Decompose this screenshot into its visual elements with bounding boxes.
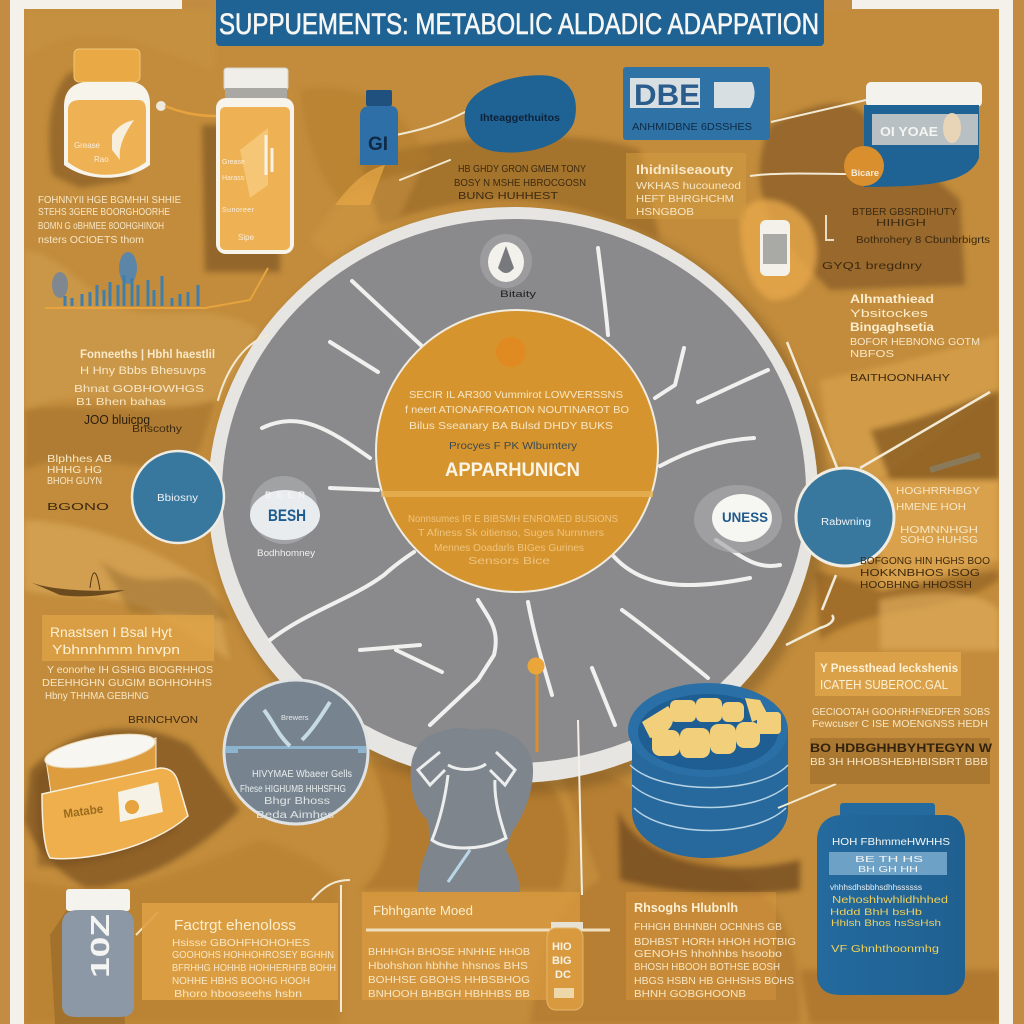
- icon: top-right jar: OI YOAE: [880, 124, 938, 139]
- text block: left lower: HHHG HG: [47, 464, 102, 476]
- icon: small blue bottle: GI: [368, 134, 388, 155]
- text block: left lower: BHOH GUYN: [47, 475, 102, 487]
- text block: right middle: Bingaghsetia: [850, 320, 934, 334]
- callout: blue banner top right: ANHMIDBNE 6DSSHES: [632, 122, 752, 133]
- icon: large blue jar: BH GH HH: [858, 865, 918, 874]
- icon: small label bottle: HIO: [552, 941, 572, 953]
- text block: right lower: HMENE HOH: [896, 501, 966, 513]
- text block: bottom center panel: [312, 880, 610, 1012]
- icon: small label bottle: [547, 922, 583, 1010]
- text block: right middle: [850, 292, 980, 384]
- right blue circle: [787, 342, 990, 566]
- central orange hub: Procyes F PK Wlbumtery: [449, 440, 578, 452]
- callout: grey lens: Bhgr Bhoss: [264, 795, 330, 807]
- text block: right panel: BO HDBGHHBYHTEGYN W: [810, 741, 993, 755]
- text block: right lower: HOKKNBHOS ISOG: [860, 567, 980, 579]
- text block: upper left: nsters OCIOETS thom: [38, 234, 144, 246]
- text block: right panel: Y Pnessthead leckshenis: [820, 661, 958, 675]
- text block: bottom left panel: BFRHHG HOHHB HOHHERHFB BOHH: [172, 962, 336, 974]
- text block: left middle: Bnscothy: [132, 423, 183, 435]
- text block: upper left: STEHS 3GERE BOORGHOORHE: [38, 206, 170, 218]
- text block: left panel upper: DEEHHGHN GUGIM BOHHOHHS: [42, 677, 212, 689]
- callout: blue banner top right: DBE: [634, 79, 700, 112]
- callout: blue banner top right: [623, 67, 770, 140]
- callout: grey lens: Beda Aimhes: [256, 809, 334, 821]
- text block: left middle: Fonneeths | Hbhl haestlil: [80, 347, 215, 361]
- central orange hub: Sensors Bice: [468, 556, 551, 567]
- central orange hub: Nonnsumes IR E BIBSMH ENROMED BUSIONS: [408, 514, 618, 525]
- text block: left middle: Bhnat GOBHOWHGS: [74, 383, 204, 395]
- icon: top-left jar: [49, 49, 150, 188]
- text block: top right column: HSNGBOB: [636, 206, 694, 218]
- text block: left middle: JOO bluicpg: [84, 412, 150, 427]
- text block: left panel upper: Y eonorhe IH GSHIG BIOGRHHOS: [47, 664, 213, 676]
- text block: left lower: [47, 453, 112, 513]
- text block: right lower: HOOBHNG HHOSSH: [860, 579, 972, 591]
- text block: left panel upper: [42, 615, 214, 726]
- text block: bottom right: [626, 892, 796, 1000]
- callout: grey lens: Brewers: [281, 713, 309, 722]
- text block: right middle: Alhmathiead: [850, 292, 934, 306]
- text block: left middle: H Hny Bbbs Bhesuvps: [80, 365, 207, 377]
- text block: right lower: SOHO HUHSG: [900, 534, 978, 546]
- text block: right upper: [822, 206, 990, 272]
- icon: cream jar lower left: Matabe: [62, 801, 104, 821]
- text block: bottom left panel: Factrgt ehenoloss: [174, 917, 296, 934]
- text block: right panel: ICATEH SUBEROC.GAL: [820, 677, 948, 692]
- icon: small airplane sketch: [30, 573, 125, 596]
- left blue circle: [132, 451, 224, 543]
- icon: left badge BEST: BEER: [265, 490, 306, 500]
- text block: bottom left panel: NOHHE HBHS BOOHG HOOH: [172, 975, 310, 987]
- callout: grey lens: HIVYMAE Wbaeer Gells: [252, 768, 352, 780]
- bar chart: mini skyline: [45, 252, 268, 308]
- icon: top-left tall bottle: [156, 68, 294, 272]
- central orange hub: APPARHUNICN: [445, 460, 580, 481]
- text block: bottom right: FHHGH BHHNBH OCHNHS GB: [634, 921, 782, 933]
- text block: right upper: GYQ1 bregdnry: [822, 260, 923, 272]
- icon: top droplet badge: [480, 234, 537, 299]
- icon: large blue jar: [817, 803, 965, 995]
- icon: top-left tall bottle: Grease: [222, 159, 245, 166]
- text block: right panel: GECIOOTAH GOOHRHFNEDFER SOBS: [812, 706, 990, 718]
- icon: top-right jar: [750, 82, 982, 187]
- text block: top center: [454, 163, 586, 202]
- connector line: center to bottom: [578, 720, 582, 895]
- text block: left panel upper: BRINCHVON: [128, 714, 198, 726]
- icon: small label bottle: BIG: [552, 955, 572, 967]
- text block: bottom center panel: Hbohshon hbhhe hhsnos BHS: [368, 960, 528, 972]
- icon: top-left jar: Rao: [94, 155, 109, 164]
- text block: upper left: BOMN G oBHMEE 8OOHGHINOH: [38, 220, 164, 232]
- text block: top right column: Ihidnilseaouty: [636, 162, 734, 177]
- central circular diagram: [208, 207, 828, 794]
- text block: right lower: HOGHRRHBGY: [896, 485, 980, 497]
- text block: top right column: WKHAS hucouneod: [636, 180, 741, 192]
- icon: small label bottle: DC: [555, 969, 571, 981]
- text block: right middle: NBFOS: [850, 348, 894, 360]
- text block: bottom right: BHOSH HBOOH BOTHSE BOSH: [634, 961, 780, 973]
- text block: right lower: HOMNNHGH: [900, 524, 978, 536]
- text block: bottom left panel: [142, 903, 338, 1000]
- icon: large blue jar: vhhhsdhsbbhsdhhssssss: [830, 883, 922, 892]
- text block: right middle: BAITHOONHAHY: [850, 372, 950, 384]
- text block: right lower: BOFGONG HIN HGHS BOO: [860, 555, 990, 567]
- text block: left lower: Blphhes AB: [47, 453, 112, 465]
- icon: blue bowl stack with pills: [628, 683, 836, 858]
- text block: right upper: BTBER GBSRDIHUTY: [852, 206, 957, 218]
- icon: cream jar lower left: [36, 727, 188, 867]
- text block: top center: BUNG HUHHEST: [458, 190, 559, 202]
- text block: left middle: [74, 335, 268, 435]
- text block: top center: BOSY N MSHE HBROCGOSN: [454, 177, 586, 189]
- text block: right middle: Ybsitockes: [850, 308, 929, 320]
- icon: right badge UNESS: UNESS: [722, 509, 768, 525]
- icon: large blue jar: Hhlsh Bhos hsSsHsh: [831, 918, 941, 928]
- icon: top droplet badge: Bitaity: [500, 289, 537, 299]
- text block: bottom right: BDHBST HORH HHOH HOTBIG: [634, 936, 796, 948]
- icon: grey bottle lower left: [50, 889, 158, 1024]
- text block: right panel: Fewcuser C ISE MOENGNSS HEDH: [812, 718, 988, 730]
- right blue circle: Rabwning: [821, 517, 871, 528]
- text block: bottom right: Rhsoghs Hlubnlh: [634, 900, 738, 915]
- icon: small blue bottle: [335, 90, 465, 205]
- icon: large blue jar: BE TH HS: [855, 855, 923, 864]
- central orange hub: f neert ATIONAFROATION NOUTINAROT BO: [405, 404, 629, 416]
- text block: bottom right: GENOHS hhohhbs hsoobo: [634, 948, 782, 960]
- text block: top right column: [626, 153, 746, 219]
- central orange hub: Bilus Sseanary BA Bulsd DHDY BUKS: [409, 420, 613, 432]
- title: SUPPUEMENTS: METABOLIC ALDADIC ADAPPATION: [219, 8, 819, 41]
- text block: bottom right: HBGS HSBN HB GHHSHS BOHS: [634, 975, 794, 987]
- icon: human torso: [411, 728, 533, 892]
- text block: upper left: FOHNNYII HGE BGMHHI SHHIE: [38, 194, 181, 206]
- text block: bottom left panel: GOOHOHS HOHHOHROSEY BGHHN: [172, 949, 334, 961]
- text block: bottom left panel: Hsisse GBOHFHOHOHES: [172, 937, 310, 949]
- left blue circle: Bbiosny: [157, 493, 198, 504]
- text block: right lower: [786, 455, 990, 645]
- text block: top right column: HEFT BHRGHCHM: [636, 193, 734, 205]
- callout: blue oval: Ihteaggethuitos: [480, 113, 560, 124]
- text block: bottom center panel: Fbhhgante Moed: [373, 903, 473, 918]
- icon: left badge BEST: BESH: [268, 506, 306, 525]
- icon: top-left tall bottle: Harass: [222, 175, 245, 182]
- icon: top-left jar: Grease: [74, 141, 101, 150]
- central orange hub: SECIR IL AR300 Vummirot LOWVERSSNS: [409, 389, 623, 401]
- icon: large blue jar: Nehoshhwhlidhhhed: [832, 894, 948, 906]
- icon: large blue jar: VF Ghnhthoonmhg: [831, 944, 939, 955]
- icon: left badge BEST: [250, 476, 320, 559]
- text block: bottom center panel: BNHOOH BHBGH HBHHBS BB: [368, 988, 530, 1000]
- text block: top center: HB GHDY GRON GMEM TONY: [458, 163, 586, 175]
- text block: right panel: BB 3H HHOBSHEBHBISBRT BBB: [810, 756, 988, 768]
- text block: right panel: [810, 652, 993, 784]
- text block: bottom left panel: Bhoro hbooseehs hsbn: [174, 988, 302, 1000]
- icon: large blue jar: HOH FBhmmeHWHHS: [832, 837, 950, 848]
- text block: left middle: B1 Bhen bahas: [76, 396, 166, 408]
- radial connector lines: [262, 248, 780, 725]
- central orange hub: T Afiness Sk oitienso, Suges Nurnmers: [418, 528, 604, 539]
- text block: left lower: BGONO: [47, 501, 109, 513]
- central orange hub: Mennes Ooadarls BIGes Gurines: [434, 543, 584, 554]
- text block: right middle: BOFOR HEBNONG GOTM: [850, 336, 980, 348]
- callout: grey lens: Fhese HIGHUMB HHHSFHG: [240, 783, 346, 795]
- text block: bottom right: BHNH GOBGHOONB: [634, 988, 746, 1000]
- text block: left panel upper: Ybhnnhmm hnvpn: [52, 642, 180, 657]
- icon: large blue jar: Hddd BhH bsHb: [830, 907, 922, 917]
- icon: small pill bottle: [760, 220, 790, 276]
- callout: blue oval: [465, 75, 576, 153]
- callout: grey lens: [224, 680, 368, 824]
- text block: left panel upper: Rnastsen I Bsal Hyt: [50, 624, 172, 640]
- icon: right badge UNESS: [694, 485, 782, 553]
- text block: right upper: Bothrohery 8 Cbunbrbigrts: [856, 234, 990, 246]
- central orange hub: [376, 310, 658, 592]
- text block: right upper: HIHIGH: [876, 217, 926, 229]
- icon: orange pin marker: [528, 658, 544, 752]
- icon: grey bottle lower left: 10Z: [85, 914, 115, 978]
- icon: top-left tall bottle: Sipe: [238, 233, 255, 242]
- icon: top-left tall bottle: Sunoreer: [222, 207, 255, 214]
- text block: upper left: [38, 194, 181, 246]
- text block: left panel upper: Hbny THHMA GEBHNG: [45, 690, 149, 702]
- title: [216, 0, 824, 46]
- text block: bottom center panel: BHHHGH BHOSE HNHHE HHOB: [368, 946, 530, 958]
- icon: left badge BEST: Bodhhomney: [257, 548, 315, 559]
- text block: bottom center panel: BOHHSE GBOHS HHBSBHOG: [368, 974, 530, 986]
- icon: top-right jar: Bicare: [851, 168, 879, 178]
